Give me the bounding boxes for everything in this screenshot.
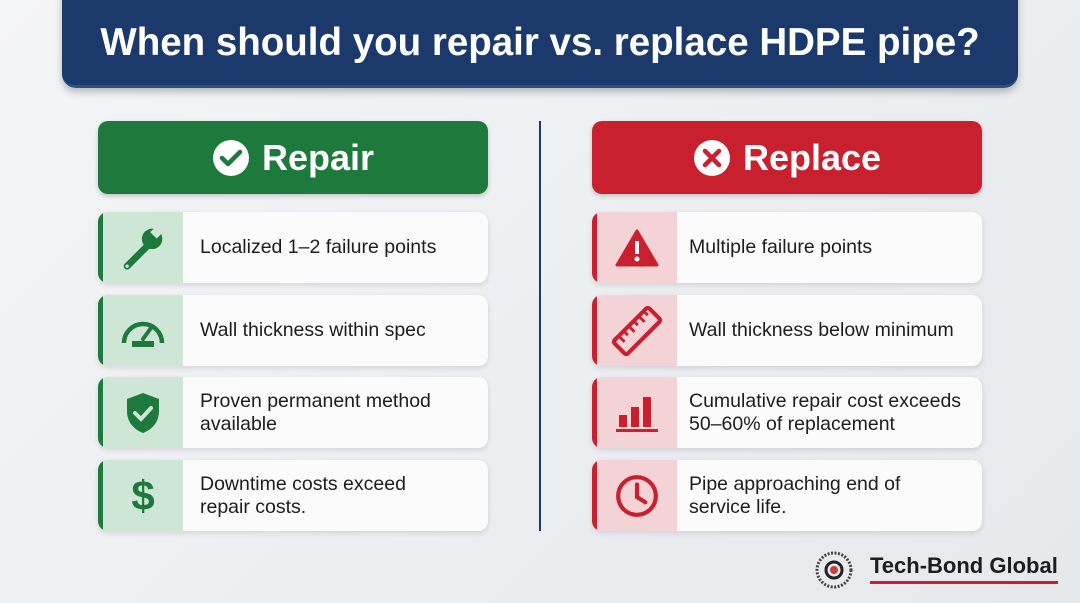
- card: localized: Localized 1–2 failure points: [200, 236, 436, 258]
- card: cumulative cost: Cumulative repair cost exceeds: [689, 390, 961, 412]
- card: end of life: [592, 460, 982, 531]
- title: [62, 0, 1018, 88]
- card: downtime: [98, 460, 488, 531]
- logo: [816, 552, 1058, 588]
- card: end of life: Pipe approaching end of: [689, 472, 900, 494]
- card: proven method: Proven permanent method: [200, 390, 431, 412]
- card: proven method: available: [200, 412, 277, 434]
- divider: [539, 121, 541, 531]
- header: replace: Replace: [743, 136, 881, 178]
- card: wall below min: [592, 295, 982, 366]
- card: proven method: [98, 377, 488, 448]
- card: wall below min: Wall thickness below minimum: [689, 319, 954, 341]
- card: end of life: service life.: [689, 496, 787, 518]
- card: wall within spec: Wall thickness within spec: [200, 319, 426, 341]
- header: replace: [592, 121, 982, 194]
- card: multiple failure: Multiple failure points: [689, 236, 872, 258]
- card: localized: [98, 212, 488, 283]
- card: multiple failure: [592, 212, 982, 283]
- card: downtime: Downtime costs exceed: [200, 472, 406, 494]
- brand name: Tech-Bond Global: [870, 553, 1058, 578]
- card: downtime: $: [131, 472, 155, 518]
- header: repair: Repair: [262, 136, 374, 178]
- title: When should you repair vs. replace HDPE pipe?: [100, 21, 980, 64]
- card: wall within spec: [98, 295, 488, 366]
- icon: seal: [816, 552, 852, 588]
- card: cumulative cost: 50–60% of replacement: [689, 412, 895, 434]
- card: downtime: repair costs.: [200, 496, 306, 518]
- header: repair: [98, 121, 488, 194]
- card: cumulative cost: [592, 377, 982, 448]
